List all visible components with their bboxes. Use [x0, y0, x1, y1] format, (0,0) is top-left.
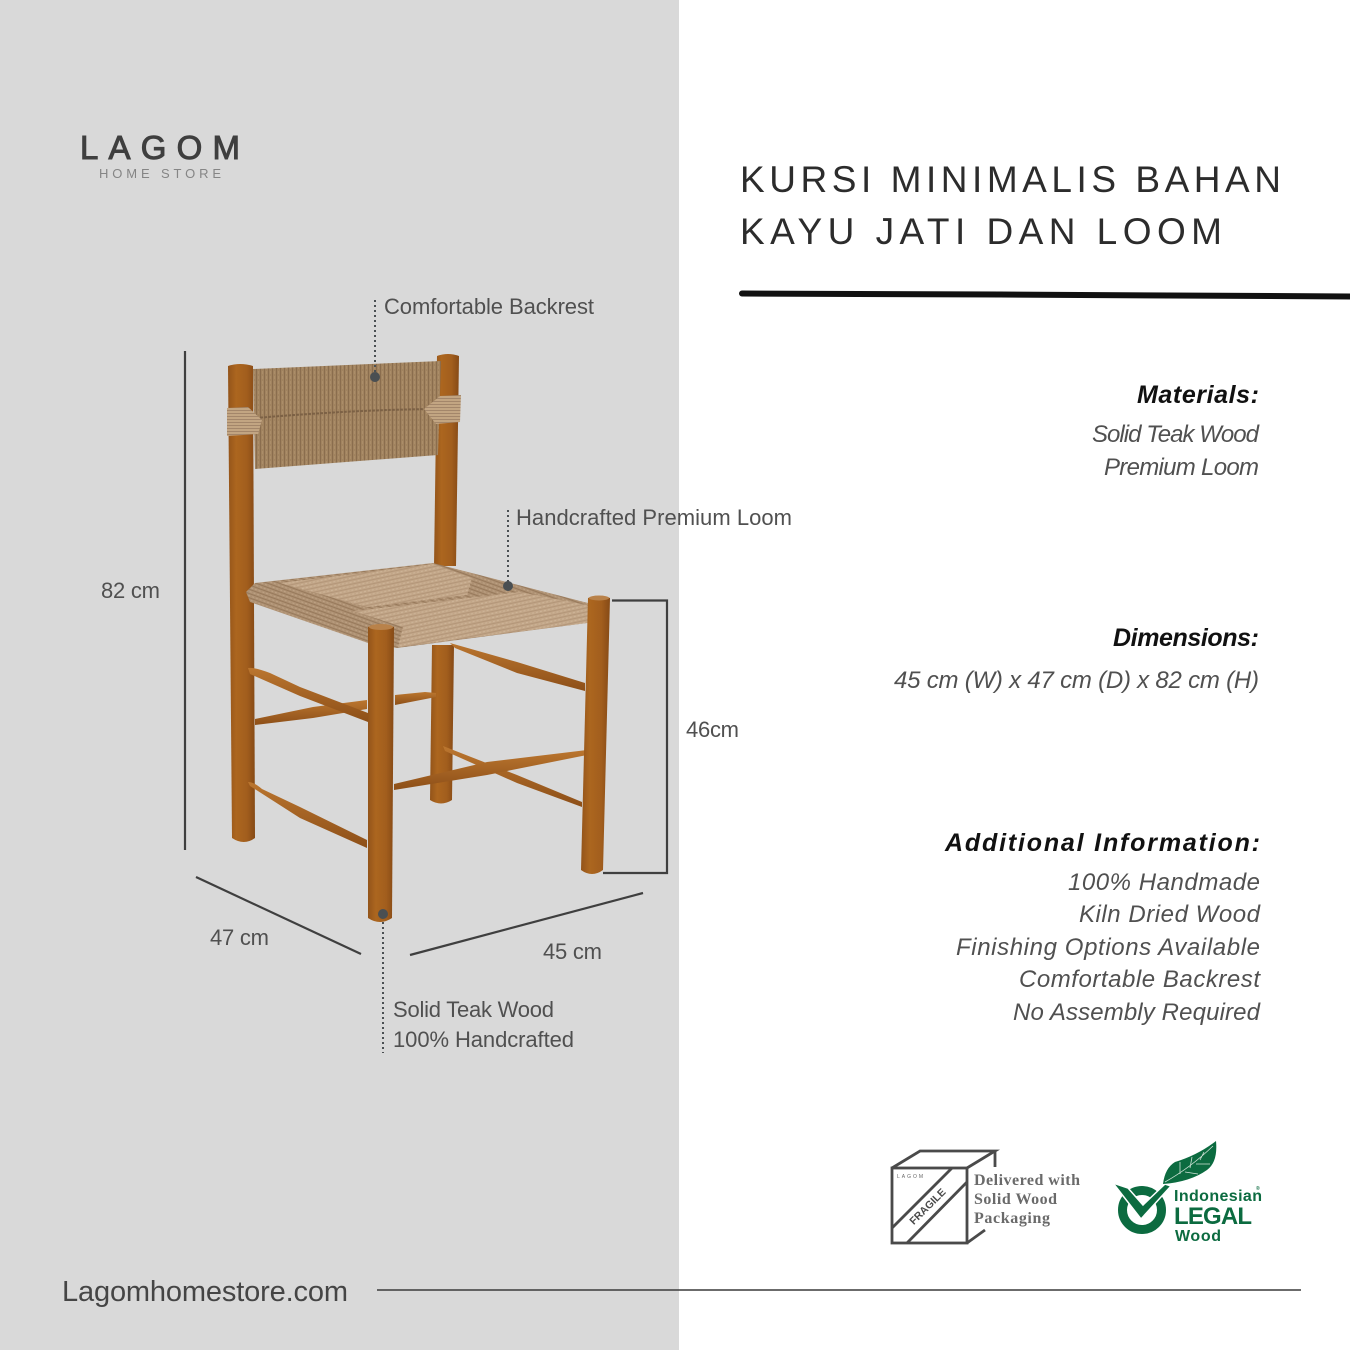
callout: solid teak wood: 100% Handcrafted: [393, 1027, 574, 1052]
dimensions block: [894, 624, 1259, 694]
additional information block: Kiln Dried Wood: [1079, 901, 1261, 928]
icon: indonesian legal wood logo: Indonesian: [1174, 1188, 1262, 1205]
title: KURSI MINIMALIS BAHAN: [740, 159, 1281, 200]
additional information block: 100% Handmade: [1068, 869, 1260, 896]
illustration: chair: [227, 354, 610, 922]
callout: comfortable backrest: [370, 294, 594, 382]
materials block: Premium Loom: [1104, 454, 1259, 481]
callout: handcrafted premium loom: Handcrafted Premium Loom: [516, 505, 792, 530]
icon: indonesian legal wood logo: Wood: [1175, 1228, 1221, 1245]
icon: indonesian legal wood logo: [1113, 1141, 1262, 1245]
additional information block: Finishing Options Available: [956, 934, 1260, 961]
icon: fragile packaging box: FRAGILE: [907, 1186, 948, 1227]
materials block: Solid Teak Wood: [1092, 421, 1260, 448]
dimension lines: [185, 351, 667, 955]
callout: solid teak wood: [378, 909, 574, 1053]
callout: handcrafted premium loom: [503, 505, 792, 591]
dimension labels: [101, 578, 739, 964]
back right lower leg: [430, 645, 454, 804]
icon: fragile packaging box: LAGOM: [897, 1174, 923, 1180]
brand logo: LAGOM: [80, 129, 240, 166]
packaging text: [974, 1172, 1080, 1227]
packaging text: Solid Wood: [974, 1191, 1057, 1208]
packaging text: Packaging: [974, 1210, 1050, 1227]
callout: comfortable backrest: Comfortable Backrest: [384, 294, 594, 319]
additional information block: No Assembly Required: [1013, 999, 1261, 1026]
dimension labels: 45 cm: [543, 939, 602, 964]
materials block: [1092, 381, 1260, 481]
additional information block: [944, 829, 1261, 1026]
woven seat: [246, 563, 594, 648]
front right post: [581, 596, 610, 874]
icon: indonesian legal wood logo: ®: [1256, 1185, 1260, 1192]
materials block: Materials:: [1137, 381, 1259, 409]
footer rule: [377, 1289, 1301, 1291]
website footer: Lagomhomestore.com: [62, 1276, 348, 1308]
dimension labels: 46cm: [686, 717, 739, 742]
title: [740, 159, 1281, 252]
back right post: [434, 354, 459, 566]
icon: fragile packaging box: [892, 1150, 995, 1243]
additional information block: Comfortable Backrest: [1019, 966, 1261, 993]
spindle rails: [248, 668, 587, 848]
woven backrest: [253, 361, 441, 469]
front left post: [368, 624, 394, 922]
dimensions block: 45 cm (W) x 47 cm (D) x 82 cm (H): [894, 667, 1259, 694]
stretchers behind: [255, 643, 585, 807]
back left post: [228, 364, 255, 842]
title: KAYU JATI DAN LOOM: [740, 211, 1222, 252]
title underline: [742, 294, 1350, 296]
right rope wrap: [424, 395, 461, 424]
dimension labels: 47 cm: [210, 925, 269, 950]
dimensions block: Dimensions:: [1113, 624, 1259, 652]
left rope wrap: [227, 407, 262, 436]
callout: solid teak wood: Solid Teak Wood: [393, 997, 554, 1022]
packaging text: Delivered with: [974, 1172, 1080, 1189]
dimension labels: 82 cm: [101, 578, 160, 603]
panel: grey background: [0, 0, 679, 1350]
icon: indonesian legal wood logo: LEGAL: [1174, 1203, 1252, 1230]
additional information block: Additional Information:: [944, 829, 1260, 857]
brand logo: HOME STORE: [99, 166, 221, 181]
